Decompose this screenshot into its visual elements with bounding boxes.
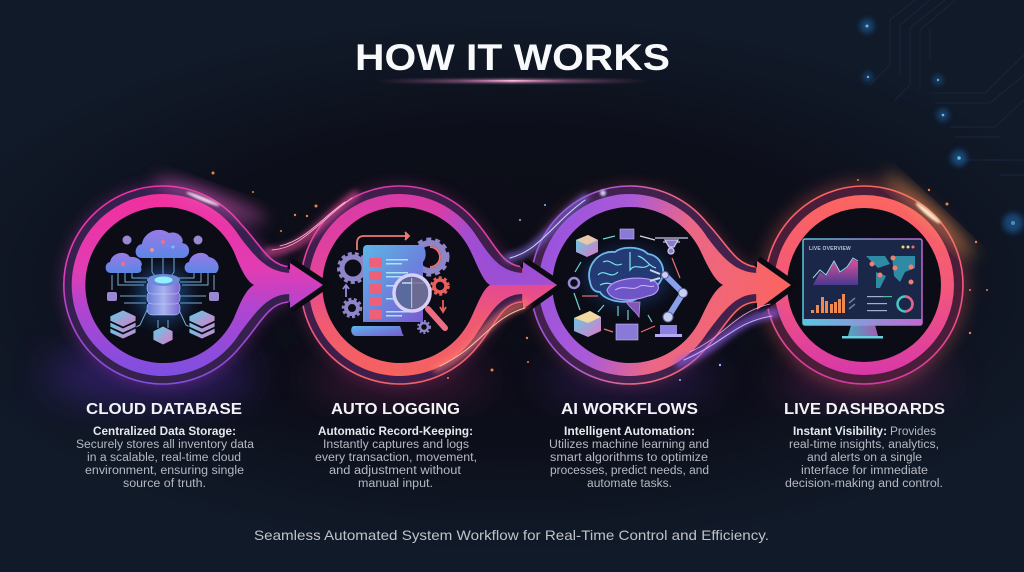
step 2 text: Instantly captures and logs xyxy=(323,439,469,451)
title: HOW IT WORKS xyxy=(355,37,670,78)
panel: line chart xyxy=(807,253,862,288)
boxes xyxy=(574,235,601,337)
icon: auto logging xyxy=(338,232,448,336)
drone xyxy=(655,238,688,254)
step 3 ring and arrow xyxy=(531,186,791,384)
cloud nodes xyxy=(107,236,219,301)
step 1 text: CLOUD DATABASE xyxy=(86,401,242,418)
monitor frame xyxy=(803,239,922,325)
step 4 ring xyxy=(760,181,968,389)
monitor stand xyxy=(842,325,883,338)
step 4 text: Provides xyxy=(890,426,936,438)
decorative glowing nodes xyxy=(860,19,1023,233)
step 3 text: smart algorithms to optimize xyxy=(550,452,708,464)
decorative circuit lines top right xyxy=(870,0,1024,175)
barcodes xyxy=(616,229,638,340)
step 2 text: and adjustment without xyxy=(329,465,462,477)
step 4 text: decision-making and control. xyxy=(785,478,943,490)
step 1 text: environment, ensuring single xyxy=(85,465,244,477)
step 1 text: source of truth. xyxy=(123,478,206,490)
step 4 text: LIVE DASHBOARDS xyxy=(784,401,945,418)
step 1 text: Centralized Data Storage: xyxy=(93,426,236,438)
server stacks xyxy=(110,310,215,345)
footer tagline: Seamless Automated System Workflow for Real-Time Control and Efficiency. xyxy=(254,527,769,543)
robot arm xyxy=(650,270,688,337)
scroll document xyxy=(363,245,426,322)
gears xyxy=(338,239,448,333)
panel: bar chart xyxy=(807,291,862,316)
circuit connectors xyxy=(112,258,214,330)
step 2 text: AUTO LOGGING xyxy=(331,401,460,418)
step 2 text: Automatic Record-Keeping: xyxy=(318,426,473,438)
monitor bezel xyxy=(803,319,922,325)
panel: world map xyxy=(864,253,917,288)
left cloud xyxy=(106,253,142,273)
particles xyxy=(212,172,988,381)
energy wisps and flares xyxy=(151,168,980,368)
step 1 ring and arrow xyxy=(64,186,323,384)
icon: ai workflows xyxy=(569,229,688,340)
icon: live dashboard monitor xyxy=(803,239,922,338)
step 1 text: Securely stores all inventory data xyxy=(76,439,255,451)
step 1 text xyxy=(76,401,255,490)
process arrows xyxy=(343,232,446,312)
magnifier xyxy=(394,275,445,328)
step 3 text xyxy=(549,401,709,490)
step 1 text: in a scalable, real-time cloud xyxy=(87,452,241,464)
step 4 text xyxy=(784,401,945,490)
icon: cloud database xyxy=(106,230,219,345)
step 2 text: every transaction, movement, xyxy=(315,452,477,464)
step 3 text: AI WORKFLOWS xyxy=(561,401,698,418)
dashboard label: LIVE OVERVIEW xyxy=(809,246,851,252)
step 2 text: manual input. xyxy=(358,478,433,490)
step 4 text: real-time insights, analytics, xyxy=(789,439,939,451)
brain xyxy=(585,248,669,317)
step 4 text: Instant Visibility: xyxy=(793,426,887,438)
step 3 text: automate tasks. xyxy=(587,478,672,490)
workflow arrows xyxy=(569,236,680,332)
step 3 text: processes, predict needs, and xyxy=(550,465,709,477)
step 2 text xyxy=(315,401,477,490)
window dots xyxy=(902,246,914,248)
scroll base xyxy=(351,326,404,336)
step 3 text: Utilizes machine learning and xyxy=(549,439,709,451)
record rows xyxy=(369,258,408,319)
step 2 ring and arrow xyxy=(301,186,557,384)
right cloud xyxy=(185,253,219,273)
step 4 text: and alerts on a single xyxy=(807,452,922,464)
step 3 text: Intelligent Automation: xyxy=(564,426,695,438)
step 4 text: interface for immediate xyxy=(801,465,928,477)
top cloud xyxy=(136,230,189,258)
title underline glow xyxy=(375,79,650,83)
panel: donut gauge xyxy=(864,291,917,316)
database cylinder xyxy=(137,267,189,323)
